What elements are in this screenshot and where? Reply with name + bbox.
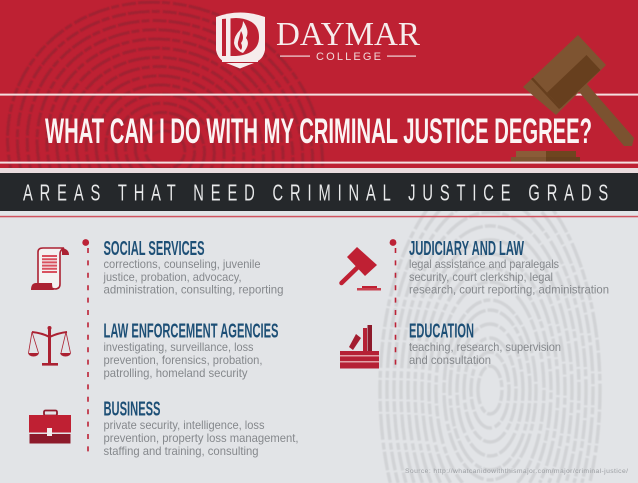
icon: shield crest <box>216 12 265 68</box>
panel: law enforcement agencies: LAW ENFORCEMENT AGENCIES <box>104 320 278 342</box>
panel: education: teaching, research, supervision <box>409 340 561 354</box>
header red panel <box>0 0 638 168</box>
panel: judiciary and law: legal assistance and paralegals <box>409 257 559 271</box>
logo: Daymar College <box>216 12 420 68</box>
panel: social services: corrections, counseling, juvenile <box>104 257 261 271</box>
fingerprint: header <box>6 0 324 168</box>
icon: scroll <box>31 248 69 290</box>
panel: judiciary and law: research, court reporting, administration <box>409 282 609 296</box>
wordmark: DAYMAR <box>276 16 420 53</box>
fingerprint: lower right <box>380 170 600 483</box>
panel: education <box>409 320 561 367</box>
panel: judiciary and law: security, court clerkship, legal <box>409 270 553 284</box>
icon: small gavel <box>342 247 381 290</box>
panel: business: private security, intelligence, loss <box>104 418 265 432</box>
panel: business <box>104 398 298 458</box>
panel: social services: SOCIAL SERVICES <box>104 238 204 260</box>
panel: business: BUSINESS <box>104 398 160 420</box>
panel: judiciary and law <box>409 238 609 296</box>
timeline: right <box>390 239 396 371</box>
light strip above banner <box>0 168 638 173</box>
source note: Source: http://whatcanidowiththismajor.com/major/criminal-justice/ <box>405 468 628 475</box>
panel: social services: administration, consulting, reporting <box>104 282 284 296</box>
panel: law enforcement agencies: patrolling, homeland security <box>104 366 248 380</box>
banner: dark band <box>0 173 638 211</box>
panel: law enforcement agencies <box>104 320 278 380</box>
panel: law enforcement agencies: prevention, forensics, probation, <box>104 353 262 367</box>
panel: business: prevention, property loss management, <box>104 431 298 445</box>
icon: briefcase <box>29 410 71 444</box>
panel: law enforcement agencies: investigating, surveillance, loss <box>104 340 254 354</box>
panel: social services: justice, probation, advocacy, <box>103 270 241 284</box>
panel: social services <box>103 238 283 296</box>
timeline: left <box>82 239 89 456</box>
red rule below banner <box>0 216 638 217</box>
icon: books <box>340 325 379 368</box>
panel: judiciary and law: JUDICIARY AND LAW <box>409 238 524 260</box>
panel: education: and consultation <box>409 353 491 367</box>
college label: COLLEGE <box>316 51 381 63</box>
icon: large gavel <box>511 35 634 162</box>
panel: business: staffing and training, consulting <box>104 444 258 458</box>
panel: education: EDUCATION <box>409 320 474 342</box>
icon: scales <box>28 326 71 366</box>
header rule lines <box>0 94 638 164</box>
